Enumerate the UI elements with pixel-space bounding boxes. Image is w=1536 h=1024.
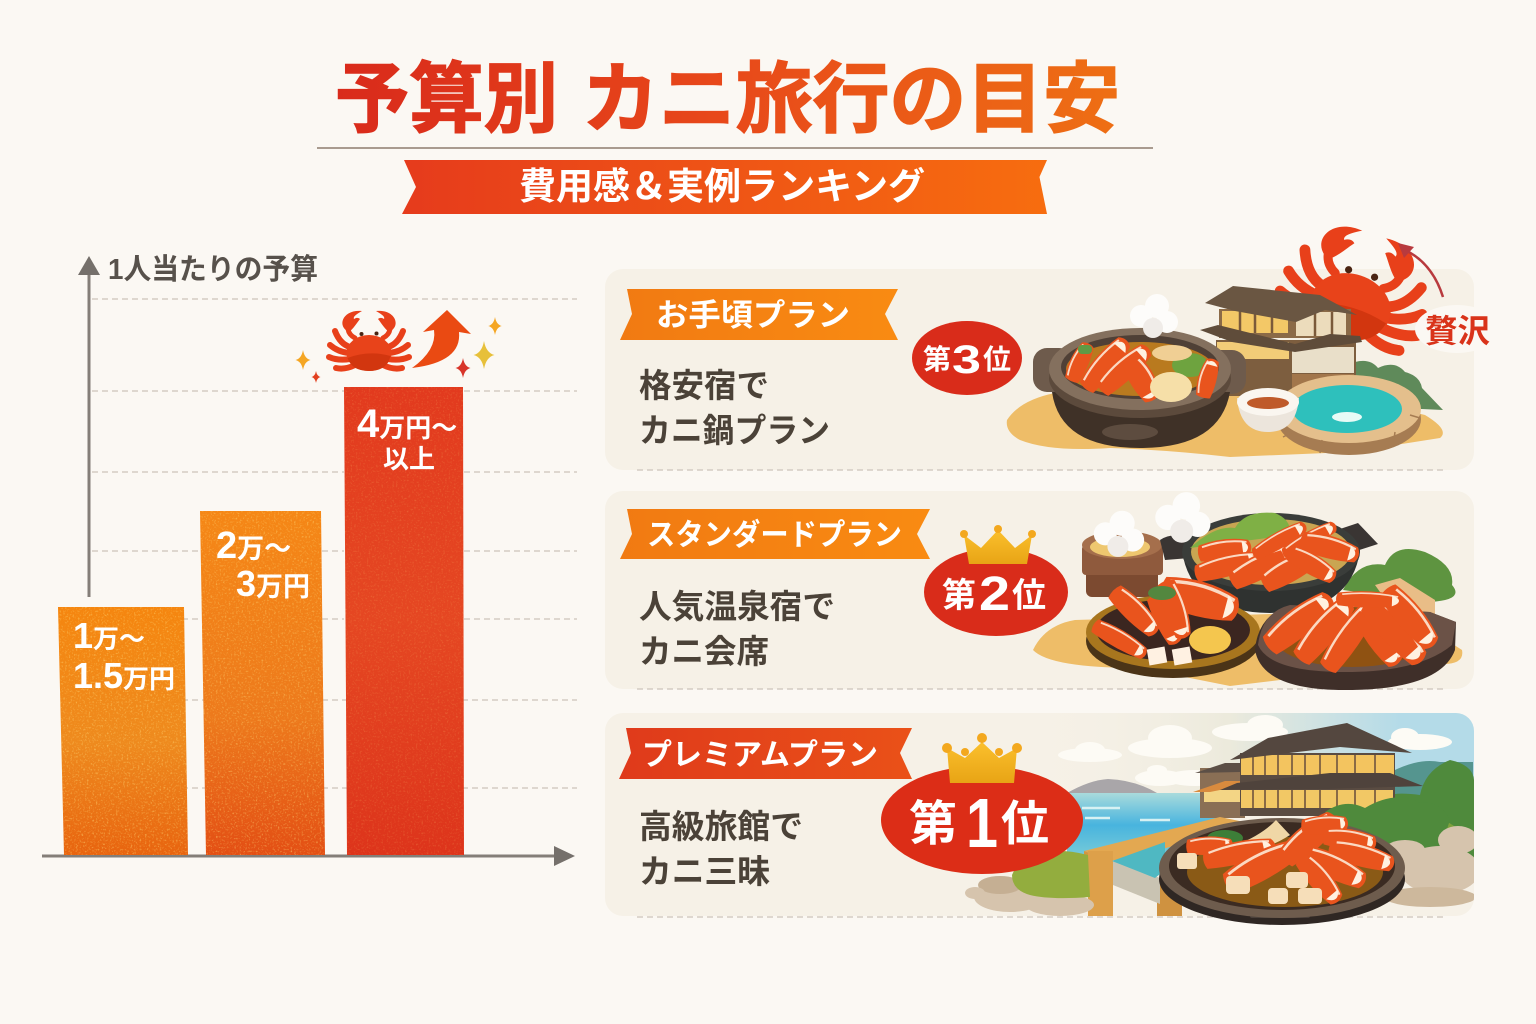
bar: 1万〜1.5万円: 1.5万円 bbox=[73, 655, 175, 696]
bush bbox=[1012, 851, 1090, 898]
mountain bbox=[1067, 779, 1157, 793]
crab bbox=[1272, 212, 1443, 359]
bar: 4万円〜以上 bbox=[344, 387, 464, 855]
left plate bbox=[1086, 572, 1260, 678]
sand ground bbox=[1007, 392, 1443, 457]
icon: sparkles bbox=[296, 317, 502, 383]
icon: crab on top bar bbox=[329, 311, 409, 371]
icon: rising arrow bbox=[412, 310, 471, 368]
label: luxury bbox=[1415, 305, 1499, 353]
plan description: 格安宿で bbox=[639, 367, 769, 404]
bar: 2万〜3万円: 2万～ bbox=[216, 525, 291, 567]
crab platter bbox=[1159, 806, 1405, 925]
plan description bbox=[639, 808, 803, 890]
rank badge: 2nd: 第 bbox=[942, 577, 976, 615]
front shrubs bbox=[1325, 798, 1450, 850]
plan description bbox=[639, 588, 835, 670]
title: カニ旅行の目安 bbox=[582, 57, 1120, 143]
bar: 4万円〜以上: 以上 bbox=[383, 444, 435, 474]
panel: standard plan, rank 2 bbox=[605, 491, 1474, 690]
rank badge: 1st: 第 bbox=[909, 798, 957, 851]
plan description: カニ三昧 bbox=[639, 853, 770, 890]
inn bbox=[1193, 723, 1423, 818]
rank badge: 3rd: 3 bbox=[952, 338, 981, 382]
subtitle ribbon: 費用感＆実例ランキング bbox=[519, 166, 925, 207]
sea bbox=[1067, 793, 1216, 854]
rank badge: 3rd: 位 bbox=[983, 344, 1011, 375]
inn bbox=[1200, 286, 1362, 396]
illustration: seaside inn with crab platter bbox=[965, 713, 1480, 916]
label: luxury: 贅沢 bbox=[1425, 313, 1490, 349]
plan description: カニ鍋プラン bbox=[639, 412, 830, 449]
plan description: 高級旅館で bbox=[639, 808, 803, 845]
plan banner: スタンダードプラン bbox=[647, 518, 902, 552]
luxury arrow bbox=[1403, 249, 1443, 297]
panel: premium plan, rank 1 bbox=[605, 713, 1480, 925]
rank badge: 2nd: 2 bbox=[979, 568, 1010, 621]
steam bbox=[1155, 492, 1210, 543]
clouds bbox=[1058, 715, 1452, 786]
bar chart: budget per person bbox=[42, 253, 577, 866]
deck railing bbox=[1084, 817, 1420, 916]
sky bbox=[1199, 713, 1474, 792]
title bbox=[335, 57, 1120, 143]
x axis bbox=[42, 846, 575, 866]
illustration: crab dishes bbox=[1033, 492, 1462, 690]
rank badge: 1st bbox=[881, 733, 1083, 874]
plan banner: お手頃プラン bbox=[656, 298, 850, 333]
sauce bowl bbox=[1237, 388, 1299, 432]
trees bbox=[1395, 760, 1474, 858]
illustration: crab hot pot and inn bbox=[1007, 212, 1499, 457]
right plate bbox=[1255, 580, 1456, 690]
y axis label: 1人当たりの予算 bbox=[108, 253, 318, 286]
rank badge: 3rd bbox=[912, 321, 1022, 395]
subtitle ribbon bbox=[402, 160, 1047, 214]
pot bbox=[1033, 328, 1246, 448]
plan banner: プレミアムプラン bbox=[642, 739, 878, 772]
rank badge: 2nd bbox=[924, 525, 1068, 636]
bar: 4万円〜以上: 4万円～ bbox=[357, 402, 457, 446]
plan banner bbox=[620, 289, 898, 340]
greens bbox=[1343, 549, 1456, 602]
crown bbox=[960, 525, 1036, 564]
bar: 1万〜1.5万円 bbox=[58, 607, 188, 855]
y axis bbox=[78, 256, 100, 597]
steam bbox=[1130, 294, 1178, 338]
bar: 2万〜3万円: 3万円 bbox=[236, 563, 310, 604]
crown bbox=[942, 733, 1022, 783]
plan description: カニ会席 bbox=[639, 633, 769, 670]
rank badge: 1st: 位 bbox=[1001, 798, 1049, 851]
panel: budget plan, rank 3 bbox=[605, 212, 1499, 470]
rank badge: 2nd: 位 bbox=[1012, 577, 1046, 615]
bar: 2万〜3万円 bbox=[200, 511, 325, 855]
wooden tub bbox=[1082, 511, 1163, 597]
rank badge: 1st: 1 bbox=[966, 784, 998, 862]
rank badge: 3rd: 第 bbox=[923, 344, 951, 375]
plan description bbox=[639, 367, 830, 449]
bar: 1万〜1.5万円: 1万～ bbox=[73, 615, 145, 656]
rocks bbox=[965, 826, 1480, 916]
plan description: 人気温泉宿で bbox=[639, 588, 835, 625]
bush bbox=[1355, 361, 1443, 410]
hot spring pool bbox=[1277, 375, 1421, 455]
plan banner bbox=[619, 728, 912, 779]
title: 予算別 bbox=[335, 57, 558, 143]
top pot bbox=[1160, 513, 1378, 613]
plan banner bbox=[620, 509, 930, 559]
